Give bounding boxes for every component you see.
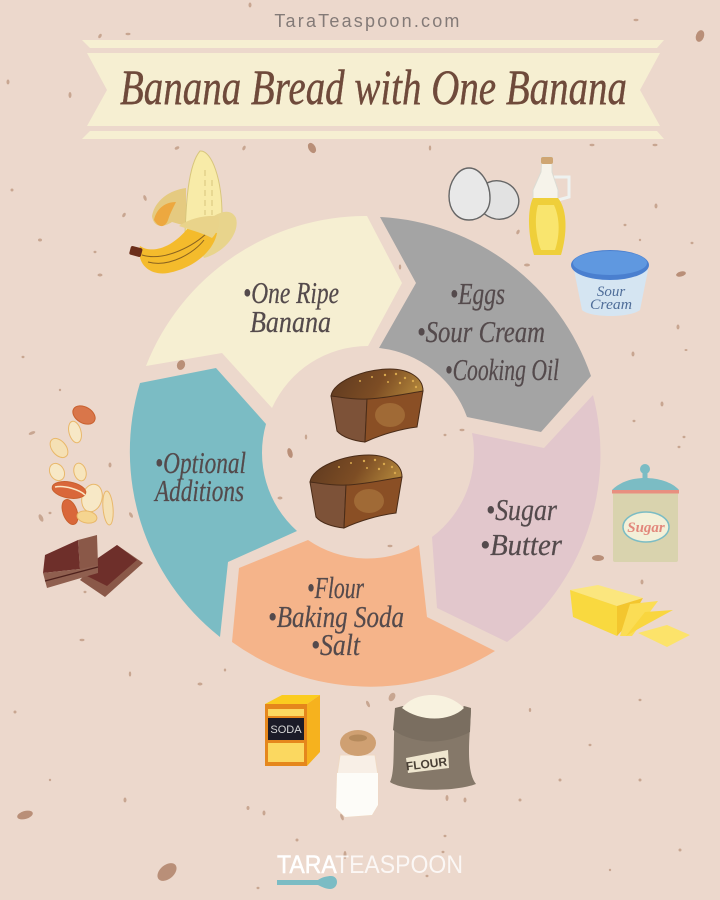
- icon: sugar jar: [612, 464, 679, 562]
- icon: banana: [129, 151, 237, 273]
- tub label: Sour: [597, 284, 625, 300]
- icon: top loaf: [331, 369, 423, 442]
- icon: eggs: [449, 168, 524, 225]
- segment: flour, baking soda, salt: •Baking Soda: [268, 599, 404, 634]
- icon: baking soda box: [265, 695, 320, 766]
- segment: one ripe banana: [146, 216, 402, 408]
- segment: one ripe banana: •One Ripe: [243, 275, 339, 310]
- segment: eggs, sour cream, oil: •Cooking Oil: [445, 352, 559, 387]
- segment: one ripe banana: Banana: [250, 304, 331, 339]
- segment: sugar and butter: •Butter: [480, 527, 563, 562]
- icon: chocolate: [43, 535, 143, 597]
- icon: spoon: [277, 876, 337, 889]
- segment: eggs, sour cream, oil: [379, 217, 591, 432]
- box label: SODA: [270, 724, 302, 736]
- sack label: FLOUR: [405, 755, 448, 773]
- segment: optional additions: Additions: [154, 473, 244, 508]
- segment: flour, baking soda, salt: [232, 540, 495, 687]
- segment: eggs, sour cream, oil: •Sour Cream: [417, 314, 545, 349]
- segment: eggs, sour cream, oil: •Eggs: [450, 276, 505, 311]
- icon: flour sack: [390, 695, 476, 790]
- title banner: [82, 40, 664, 139]
- segment: optional additions: [130, 368, 297, 637]
- segment: sugar and butter: •Sugar: [486, 492, 558, 527]
- segment: sugar and butter: [432, 395, 600, 642]
- icon: salt shaker: [336, 730, 378, 817]
- logo: TARATEASPOON: [277, 851, 463, 879]
- site url heading: TaraTeaspoon.com: [274, 11, 462, 31]
- icon: bottom loaf: [310, 455, 402, 528]
- segment: flour, baking soda, salt: •Flour: [307, 570, 365, 605]
- icon: butter: [570, 585, 690, 647]
- icon: sour cream tub: Cream: [590, 297, 632, 313]
- icon: nuts: [46, 402, 114, 527]
- jar label: Sugar: [627, 520, 665, 536]
- icon: sour cream tub: [571, 250, 649, 316]
- cycle diagram: [130, 216, 600, 687]
- segment: optional additions: •Optional: [155, 445, 246, 480]
- segment: flour, baking soda, salt: •Salt: [311, 627, 361, 662]
- icon: oil bottle: [529, 157, 569, 255]
